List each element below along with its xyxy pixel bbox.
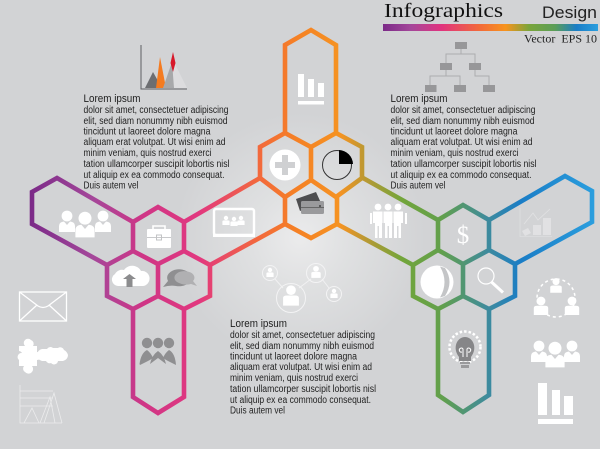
icon: grey team [140, 338, 176, 365]
arm to centre from the right [337, 178, 438, 265]
icon: large bar chart [538, 383, 573, 424]
icon: circle of people [534, 278, 579, 317]
title: Vector EPS 10 [524, 34, 597, 46]
text block: left: minim veniam, quis nostrud exerci [84, 148, 212, 159]
text block: bottom centre: ut aliquip ex ea commodo consequat. [230, 395, 371, 406]
icon: growth chart [520, 208, 552, 236]
icon: top-left peak chart [141, 45, 187, 89]
text block: left: aliquam erat volutpat. Ut wisi enim ad [84, 137, 226, 148]
text block: left: elit, sed diam nonummy nibh euismod [84, 116, 228, 127]
icon: briefcase [147, 226, 171, 248]
text block: bottom centre: Duis autem vel [230, 406, 285, 416]
text block: bottom centre: Lorem ipsum [230, 318, 287, 330]
text block: left: Lorem ipsum [84, 93, 140, 105]
left purple arm [32, 178, 133, 265]
icon: dollar: $ [457, 222, 469, 249]
text block: right: tation ullamcorper suscipit lobortis nisl [390, 159, 536, 170]
text block: bottom centre: tation ullamcorper suscipit lobortis nisl [230, 384, 376, 395]
text block: right: aliquam erat volutpat. Ut wisi enim ad [390, 137, 532, 148]
icon: cloud upload [112, 266, 150, 287]
text block: bottom centre: elit, sed diam nonummy nibh euismod [230, 341, 374, 352]
icon: outline line chart [20, 385, 62, 423]
icon: standing people [370, 204, 407, 238]
icon: globe [420, 266, 454, 298]
text block: right: ut aliquip ex ea commodo consequat. [390, 170, 532, 181]
text block: left: tincidunt ut laoreet dolore magna [84, 126, 211, 138]
icon: plus [270, 150, 300, 180]
icon: pie chart [322, 150, 353, 180]
right cluster hexagons [413, 205, 515, 309]
icon: light bulb [450, 332, 480, 368]
icon: three people [59, 211, 111, 237]
icon: puzzle pieces [18, 339, 68, 374]
text block: right: tincidunt ut laoreet dolore magna [390, 126, 518, 138]
text block: left: tation ullamcorper suscipit lobortis nisl [84, 159, 230, 170]
icon: magnifier [478, 268, 503, 292]
text block: right: elit, sed diam nonummy nibh euismod [390, 116, 534, 127]
title [383, 0, 598, 46]
icon: org chart [425, 42, 495, 92]
icon: people group [531, 341, 580, 367]
icon: speech bubbles [163, 269, 197, 287]
text block: left: ut aliquip ex ea commodo consequat. [84, 170, 224, 181]
icon: cards [296, 192, 324, 214]
text block: left [84, 93, 230, 192]
text block: bottom centre: dolor sit amet, consectetuer adipiscing [230, 330, 375, 341]
right blue arm [489, 176, 592, 264]
plus and pie hexagons [260, 133, 362, 197]
left cluster hexagons [107, 207, 210, 309]
hexagon network [32, 30, 592, 413]
text block: bottom centre: minim veniam, quis nostrud exerci [230, 373, 358, 384]
text block: right: dolor sit amet, consectetuer adipiscing [390, 105, 536, 116]
text block: left: dolor sit amet, consectetuer adipiscing [84, 105, 228, 116]
icon: envelope [20, 292, 66, 321]
text block: right [390, 93, 536, 192]
title: Infographics [384, 0, 503, 22]
text block: left: Duis autem vel [84, 180, 138, 192]
top column [285, 30, 336, 133]
text block: right: Duis autem vel [390, 180, 446, 192]
text block: bottom centre: tincidunt ut laoreet dolore magna [230, 352, 357, 362]
cards hexagon [285, 197, 337, 238]
right bottom column [438, 309, 489, 412]
text block: right: minim veniam, quis nostrud exerci [390, 148, 518, 159]
icon: bar chart in top column [298, 74, 324, 104]
left bottom column [133, 309, 184, 413]
text block: right: Lorem ipsum [390, 93, 448, 105]
title: Design [542, 3, 597, 22]
text block: bottom centre: aliquam erat volutpat. Ut wisi enim ad [230, 362, 372, 373]
arm to centre from the left [184, 178, 285, 265]
icon: connected people network [262, 264, 342, 312]
text block: bottom centre [230, 318, 376, 416]
icon: presentation screen [213, 209, 255, 237]
